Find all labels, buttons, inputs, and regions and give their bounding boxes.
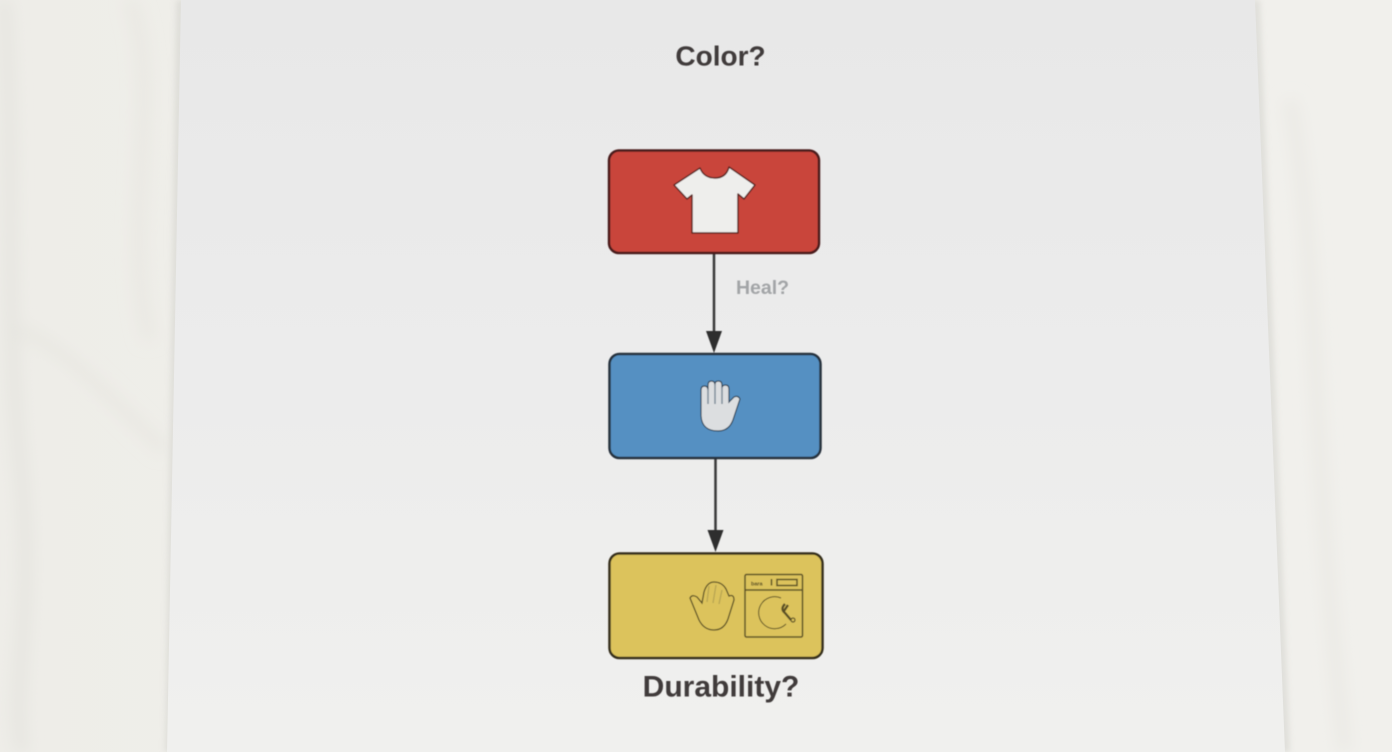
icon: washing machine: bara <box>751 582 764 588</box>
icon: washing machine <box>745 574 802 637</box>
label: Heal?: Heal? <box>736 277 789 299</box>
connector arrow: blue box to yellow box <box>708 458 724 552</box>
heading: Durability?: Durability? <box>643 670 799 704</box>
panel: yellow hand and washer box <box>610 554 822 658</box>
heading: Color?: Color? <box>675 40 766 72</box>
connector arrow: red box to blue box <box>706 253 722 353</box>
icon: t-shirt <box>674 167 755 233</box>
icon: hand outline <box>690 582 734 630</box>
panel: red garment box <box>609 150 819 253</box>
icon: open hand <box>701 381 740 431</box>
panel: blue hand box <box>610 354 820 458</box>
